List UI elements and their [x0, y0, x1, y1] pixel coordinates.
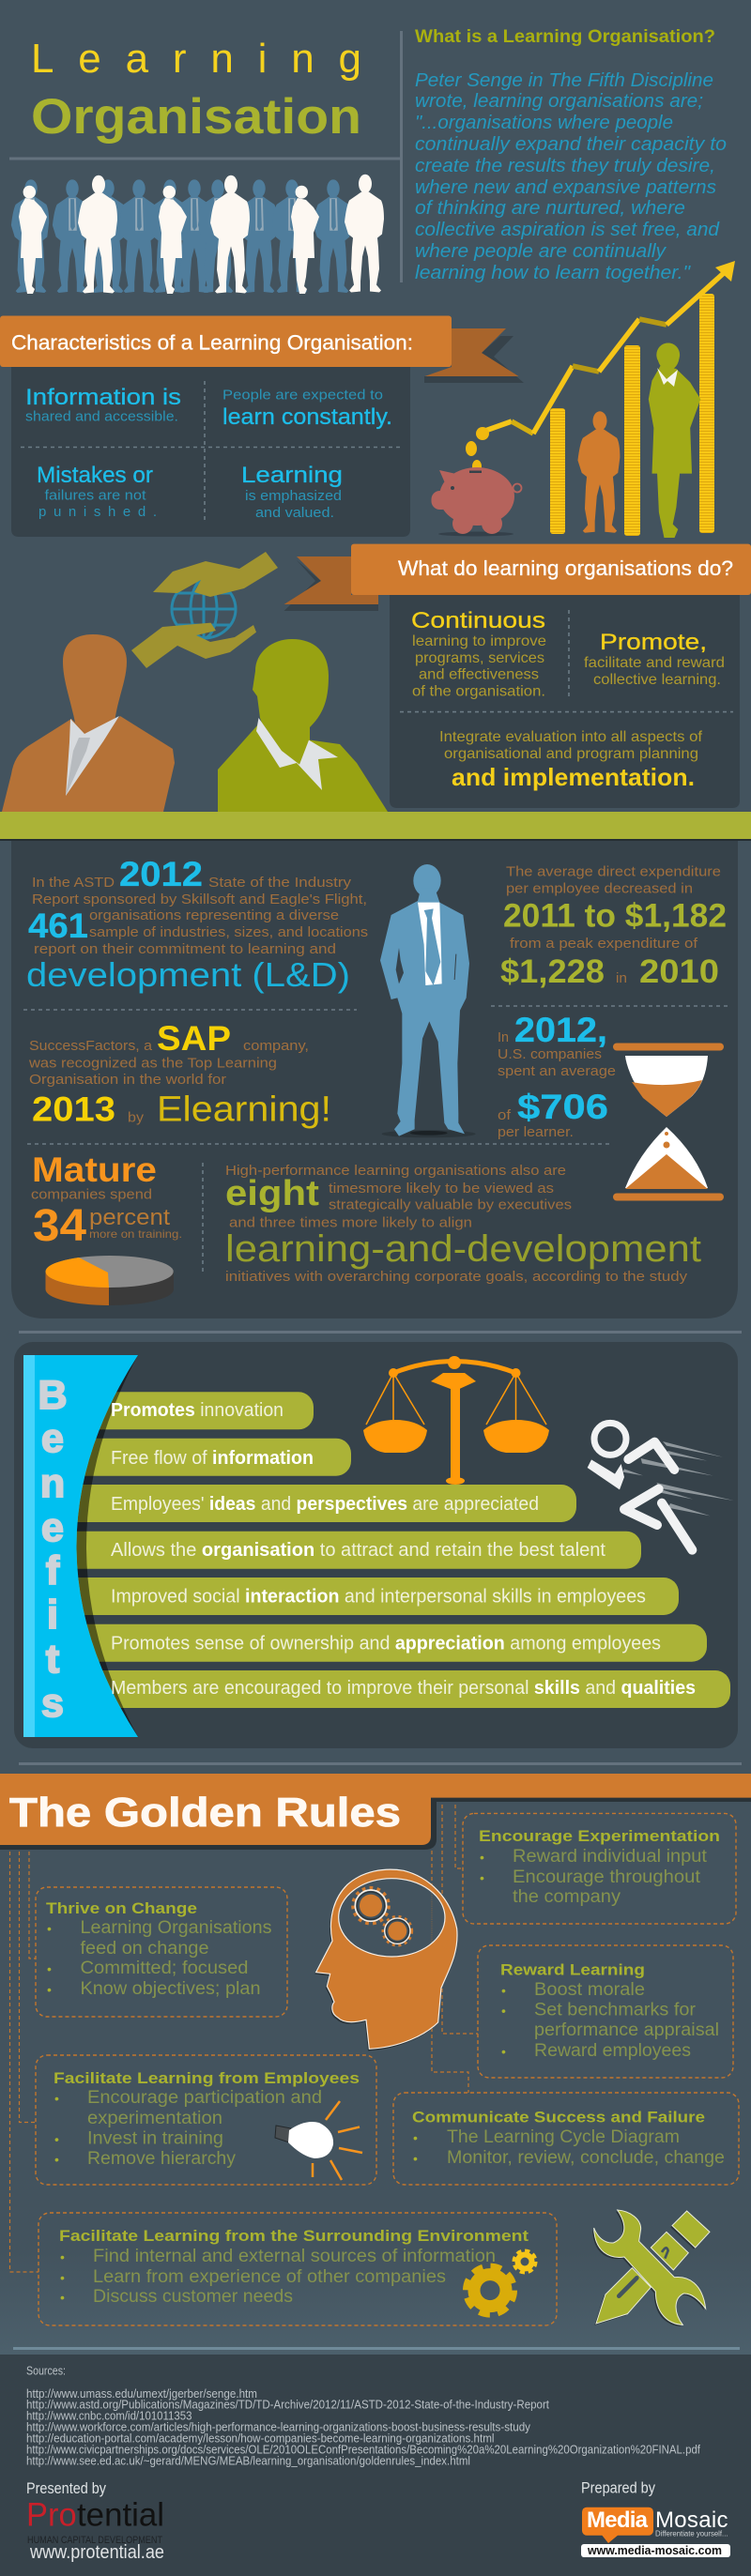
SAP statistic text: was recognized as the Top Learning — [28, 1056, 277, 1072]
benefits side tab: e — [41, 1416, 64, 1461]
box: surrounding environment: Discuss customer needs — [93, 2287, 293, 2307]
continuous text: and effectiveness — [419, 667, 539, 683]
presented by logo: Pro — [26, 2497, 77, 2534]
box: surrounding environment: • — [60, 2290, 65, 2305]
high performance text — [225, 1163, 701, 1285]
box: facilitate learning from employees: • — [54, 2132, 59, 2147]
SAP statistic text — [28, 1019, 331, 1130]
intro text block: Peter Senge in The Fifth Discipline — [415, 70, 713, 91]
mistakes text: punished. — [38, 504, 157, 520]
box: encourage experimentation — [463, 1813, 736, 1924]
icon: gears — [467, 2251, 535, 2313]
characteristics banner: Characteristics of a Learning Organisation: — [11, 330, 413, 355]
2012 spending statistic text: $706 — [517, 1088, 608, 1126]
box: facilitate learning from employees: Invest in training — [87, 2128, 223, 2149]
mature companies text: Mature — [32, 1151, 157, 1189]
mature companies text: 34 — [33, 1201, 86, 1251]
ASTD statistic text: 2012 — [119, 855, 203, 893]
SAP statistic text: Organisation in the world for — [29, 1072, 226, 1088]
continuous text: Continuous — [411, 608, 545, 633]
box: thrive on change — [36, 1887, 287, 2017]
sources list: http://www.cnbc.com/id/101011353 — [26, 2410, 192, 2423]
box: encourage experimentation: • — [480, 1870, 484, 1885]
box: reward learning: • — [501, 1983, 506, 1998]
SAP statistic text: SuccessFactors, a — [29, 1038, 153, 1054]
intro text block: of thinking are nurtured, where — [415, 198, 685, 219]
integrate text: and implementation. — [452, 763, 695, 791]
intro text block: continually expand their capacity to — [415, 134, 727, 155]
icon: running figure — [588, 1423, 734, 1550]
presented by logo: tential — [77, 2497, 164, 2534]
benefit statements: Allows the organisation to attract and retain the best talent — [111, 1540, 605, 1561]
ASTD statistic text — [26, 855, 368, 994]
intro text block: where people are continually — [415, 241, 667, 262]
high performance text: timesmore likely to be viewed as — [329, 1181, 554, 1197]
prepared by logo: Prepared by — [581, 2479, 655, 2497]
box: surrounding environment: Facilitate Learning from the Surrounding Environment — [59, 2227, 529, 2245]
title: Learning — [31, 36, 361, 82]
icon: piggy bank — [432, 467, 522, 537]
box: communicate success and failure: The Learning Cycle Diagram — [447, 2127, 680, 2147]
benefit statements: Employees' ideas and perspectives are appreciated — [111, 1494, 539, 1515]
icon: light bulb — [275, 2101, 362, 2180]
expenditure statistic text: per employee decreased in — [506, 880, 693, 896]
presented by logo: HUMAN CAPITAL DEVELOPMENT — [27, 2535, 162, 2546]
panel: footer — [0, 2355, 751, 2576]
information text — [25, 385, 181, 425]
benefits side tab: n — [40, 1461, 65, 1506]
sources list: Sources: — [26, 2365, 66, 2378]
2012 spending statistic text — [498, 1011, 616, 1140]
2012 spending statistic text: spent an average — [498, 1063, 616, 1079]
benefit statements — [111, 1400, 696, 1699]
icon: globe — [172, 580, 236, 638]
falling coins — [466, 427, 489, 473]
high performance text: learning-and-development — [225, 1228, 701, 1270]
box: facilitate learning from employees: Encourage participation and — [87, 2088, 322, 2108]
box: thrive on change: • — [47, 1982, 52, 1997]
box: reward learning: • — [501, 2044, 506, 2059]
SAP statistic text: 2013 — [32, 1090, 115, 1128]
box: reward learning: Reward employees — [534, 2041, 691, 2061]
ASTD statistic text: sample of industries, sizes, and locations — [89, 924, 368, 940]
box: facilitate learning from employees: Remove hierarchy — [87, 2149, 237, 2169]
box: reward learning — [478, 1945, 733, 2078]
continuous text — [411, 608, 546, 699]
presented by logo — [26, 2479, 164, 2563]
expenditure statistic text: The average direct expenditure — [506, 863, 721, 879]
ASTD statistic text: 461 — [28, 907, 88, 945]
benefit statements: Improved social interaction and interpersonal skills in employees — [111, 1587, 646, 1608]
information text: Information is — [25, 385, 181, 410]
what-do banner: What do learning organisations do? — [398, 556, 733, 580]
learn constantly text — [222, 388, 392, 430]
box: thrive on change: • — [47, 1921, 52, 1936]
learning text — [241, 463, 343, 521]
intro text block: What is a Learning Organisation? — [415, 27, 715, 47]
box: thrive on change: Learning Organisations — [81, 1918, 272, 1938]
box: surrounding environment: Learn from experience of other companies — [93, 2267, 446, 2287]
learn constantly text: People are expected to — [222, 388, 383, 404]
SAP statistic text: company, — [243, 1038, 309, 1054]
ASTD statistic text: In the ASTD — [32, 875, 115, 891]
characteristics banner — [0, 315, 524, 383]
box: communicate success and failure: Communicate Success and Failure — [412, 2108, 705, 2126]
box: thrive on change: • — [47, 1961, 52, 1976]
golden rules header — [0, 1774, 751, 1850]
box: facilitate learning from employees: experimentation — [87, 2109, 222, 2128]
box: communicate success and failure: Monitor, review, conclude, change — [447, 2148, 725, 2168]
benefits side tab: f — [46, 1548, 60, 1593]
box: reward learning: performance appraisal — [534, 2020, 719, 2040]
panel: statistics — [11, 841, 738, 1318]
continuous text: learning to improve — [412, 633, 546, 649]
intro text block: create the results they truly desire, — [415, 156, 715, 176]
intro text block: "...organisations where people — [415, 113, 673, 133]
benefit statements: Members are encouraged to improve their personal skills and qualities — [111, 1678, 696, 1699]
benefits side tab: i — [47, 1593, 58, 1638]
2012 spending statistic text: U.S. companies — [498, 1046, 602, 1062]
high performance text: High-performance learning organisations also are — [225, 1163, 566, 1179]
prepared by logo: Mosaic — [655, 2507, 728, 2533]
mistakes text: failures are not — [45, 488, 146, 503]
high performance text: initiatives with overarching corporate goals, according to the study — [225, 1269, 688, 1285]
SAP statistic text: Elearning! — [157, 1090, 331, 1130]
intro text block — [415, 27, 727, 283]
intro text block: wrote, learning organisations are; — [415, 91, 703, 112]
information text: shared and accessible. — [25, 409, 178, 425]
learn constantly text: learn constantly. — [222, 404, 392, 430]
golden rules header: The Golden Rules — [9, 1790, 401, 1836]
prepared by logo: Media — [587, 2507, 649, 2533]
promote text: collective learning. — [593, 672, 721, 688]
learning text: Learning — [241, 463, 343, 488]
continuous text: programs, services — [415, 650, 544, 666]
icon: hourglass — [613, 1044, 724, 1201]
box: encourage experimentation: the company — [513, 1887, 621, 1907]
icon: hands — [131, 552, 278, 668]
box: facilitate learning from employees: • — [54, 2152, 59, 2167]
icon: wrench and pencil — [592, 2210, 710, 2326]
box: encourage experimentation: Encourage throughout — [513, 1867, 701, 1887]
what-do banner — [284, 544, 751, 611]
mistakes text: Mistakes or — [37, 463, 153, 488]
integrate text — [439, 729, 703, 791]
2012 spending statistic text: In — [498, 1029, 509, 1045]
ASTD statistic text: organisations representing a diverse — [89, 907, 339, 923]
benefits side tab: e — [41, 1505, 64, 1550]
mature companies text: companies spend — [31, 1187, 152, 1203]
growth chart with piggy bank — [432, 261, 735, 538]
ASTD statistic text: development (L&D) — [26, 955, 350, 994]
expenditure statistic text: 2010 — [639, 953, 719, 990]
box: surrounding environment: Find internal and external sources of information — [93, 2247, 496, 2266]
box: encourage experimentation: • — [480, 1850, 484, 1865]
icon: businessman — [380, 864, 476, 1137]
box: reward learning: Set benchmarks for — [534, 2001, 697, 2020]
box: reward learning: Reward Learning — [500, 1961, 645, 1979]
sources list: http://www.see.ed.ac.uk/~gerard/MENG/MEAB/learning_organisation/goldenrules_index.html — [26, 2455, 470, 2468]
mature companies text: more on training. — [89, 1227, 182, 1241]
icon: balance scales — [363, 1356, 549, 1485]
rising arrow — [483, 261, 735, 434]
box: surrounding environment — [38, 2213, 557, 2325]
green divider strip — [0, 812, 751, 839]
2012 spending statistic text: 2012, — [514, 1011, 607, 1049]
integrate text: Integrate evaluation into all aspects of — [439, 729, 703, 745]
title — [31, 36, 361, 145]
panel: benefits — [14, 1342, 738, 1748]
benefits side tab: t — [46, 1637, 59, 1682]
benefit statements: Free flow of information — [111, 1448, 314, 1469]
learning text: and valued. — [255, 505, 334, 521]
sources list: http://education-portal.com/academy/lesson/how-companies-become-learning-organizations.html — [26, 2432, 494, 2446]
promote text: Promote, — [600, 630, 707, 655]
ASTD statistic text: Report sponsored by Skillsoft and Eagle's Flight, — [32, 892, 367, 907]
benefits side tab: s — [41, 1681, 64, 1726]
learning text: is emphasized — [245, 488, 342, 504]
box: communicate success and failure: • — [413, 2151, 418, 2166]
benefit statements: Promotes sense of ownership and appreciation among employees — [111, 1634, 661, 1654]
2012 spending statistic text: of — [498, 1107, 512, 1123]
intro text block: collective aspiration is set free, and — [415, 220, 720, 240]
box: facilitate learning from employees — [36, 2055, 376, 2185]
orange figure — [577, 411, 620, 533]
box: communicate success and failure: • — [413, 2130, 418, 2145]
box: reward learning: Boost morale — [534, 1980, 645, 2000]
panel: golden rules — [0, 1774, 751, 2326]
mature companies text — [31, 1151, 182, 1251]
SAP statistic text: by — [128, 1109, 145, 1126]
promote text: facilitate and reward — [584, 655, 725, 671]
sources list: http://www.astd.org/Publications/Magazines/TD/TD-Archive/2012/11/ASTD-2012-State-of-the-Industry-Report — [26, 2399, 549, 2412]
box: communicate success and failure — [393, 2093, 739, 2185]
sources list: http://www.umass.edu/umext/jgerber/senge.htm — [26, 2387, 257, 2401]
box: surrounding environment: • — [60, 2249, 65, 2264]
high performance text: eight — [225, 1174, 319, 1213]
box: facilitate learning from employees: Facilitate Learning from Employees — [54, 2069, 360, 2087]
prepared by logo: www.media-mosaic.com — [587, 2543, 722, 2557]
ASTD statistic text: report on their commitment to learning and — [34, 941, 336, 957]
expenditure statistic text: in — [616, 970, 627, 986]
ASTD statistic text: State of the Industry — [208, 875, 352, 891]
title: Organisation — [31, 89, 361, 145]
intro text block: learning how to learn together." — [415, 263, 691, 283]
high performance text: and three times more likely to align — [229, 1215, 472, 1231]
sources list — [26, 2365, 700, 2468]
orange person — [2, 634, 175, 812]
benefits side tab: B — [38, 1373, 68, 1418]
SAP statistic text: SAP — [157, 1019, 231, 1058]
prepared by logo: Differentiate yourself... — [655, 2530, 728, 2538]
box: thrive on change: Committed; focused — [81, 1959, 248, 1978]
sources list: http://www.workforce.com/articles/high-performance-learning-organizations-boost-business-results-study — [26, 2421, 531, 2434]
panel: characteristics — [0, 315, 524, 537]
2012 spending statistic text: per learner. — [498, 1124, 574, 1140]
green figure — [649, 343, 700, 538]
illustration: two people exchanging globe — [2, 552, 388, 812]
integrate text: organisational and program planning — [444, 746, 698, 762]
expenditure statistic text: 2011 to $1,182 — [503, 898, 727, 935]
icon: head with gears — [314, 1869, 457, 2050]
box: thrive on change: Thrive on Change — [46, 1899, 197, 1917]
box: encourage experimentation: Encourage Experimentation — [479, 1827, 720, 1845]
benefits side tab — [23, 1355, 138, 1737]
benefit statements: Promotes innovation — [111, 1400, 284, 1421]
coin columns — [550, 294, 714, 536]
box: thrive on change: feed on change — [81, 1939, 208, 1959]
pie chart — [45, 1256, 174, 1305]
sources list: http://www.civicpartnerships.org/docs/services/OLE/2010OLEConfPresentations/Becoming%20a%20Learning%20Organization%20FINAL.pdf — [26, 2444, 700, 2457]
expenditure statistic text: from a peak expenditure of — [510, 936, 698, 952]
intro text block: where new and expansive patterns — [415, 177, 716, 198]
prepared by logo — [581, 2479, 730, 2557]
presented by logo: www.protential.ae — [29, 2542, 164, 2563]
expenditure statistic text: $1,228 — [500, 953, 605, 990]
box: facilitate learning from employees: • — [54, 2091, 59, 2106]
mature companies text: percent — [89, 1205, 170, 1230]
people silhouettes — [11, 175, 384, 294]
promote text — [584, 630, 725, 688]
presented by logo: Presented by — [26, 2479, 106, 2497]
benefit pills — [56, 1392, 730, 1708]
expenditure statistic text — [500, 863, 727, 990]
continuous text: of the organisation. — [412, 683, 545, 699]
mistakes text — [37, 463, 157, 520]
box: encourage experimentation: Reward individual input — [513, 1847, 708, 1867]
panel: what do learning organisations do — [284, 544, 751, 808]
box: surrounding environment: • — [60, 2270, 65, 2285]
high performance text: strategically valuable by executives — [329, 1197, 572, 1213]
box: thrive on change: Know objectives; plan — [81, 1979, 261, 1999]
green person — [218, 639, 388, 812]
box: reward learning: • — [501, 2003, 506, 2018]
